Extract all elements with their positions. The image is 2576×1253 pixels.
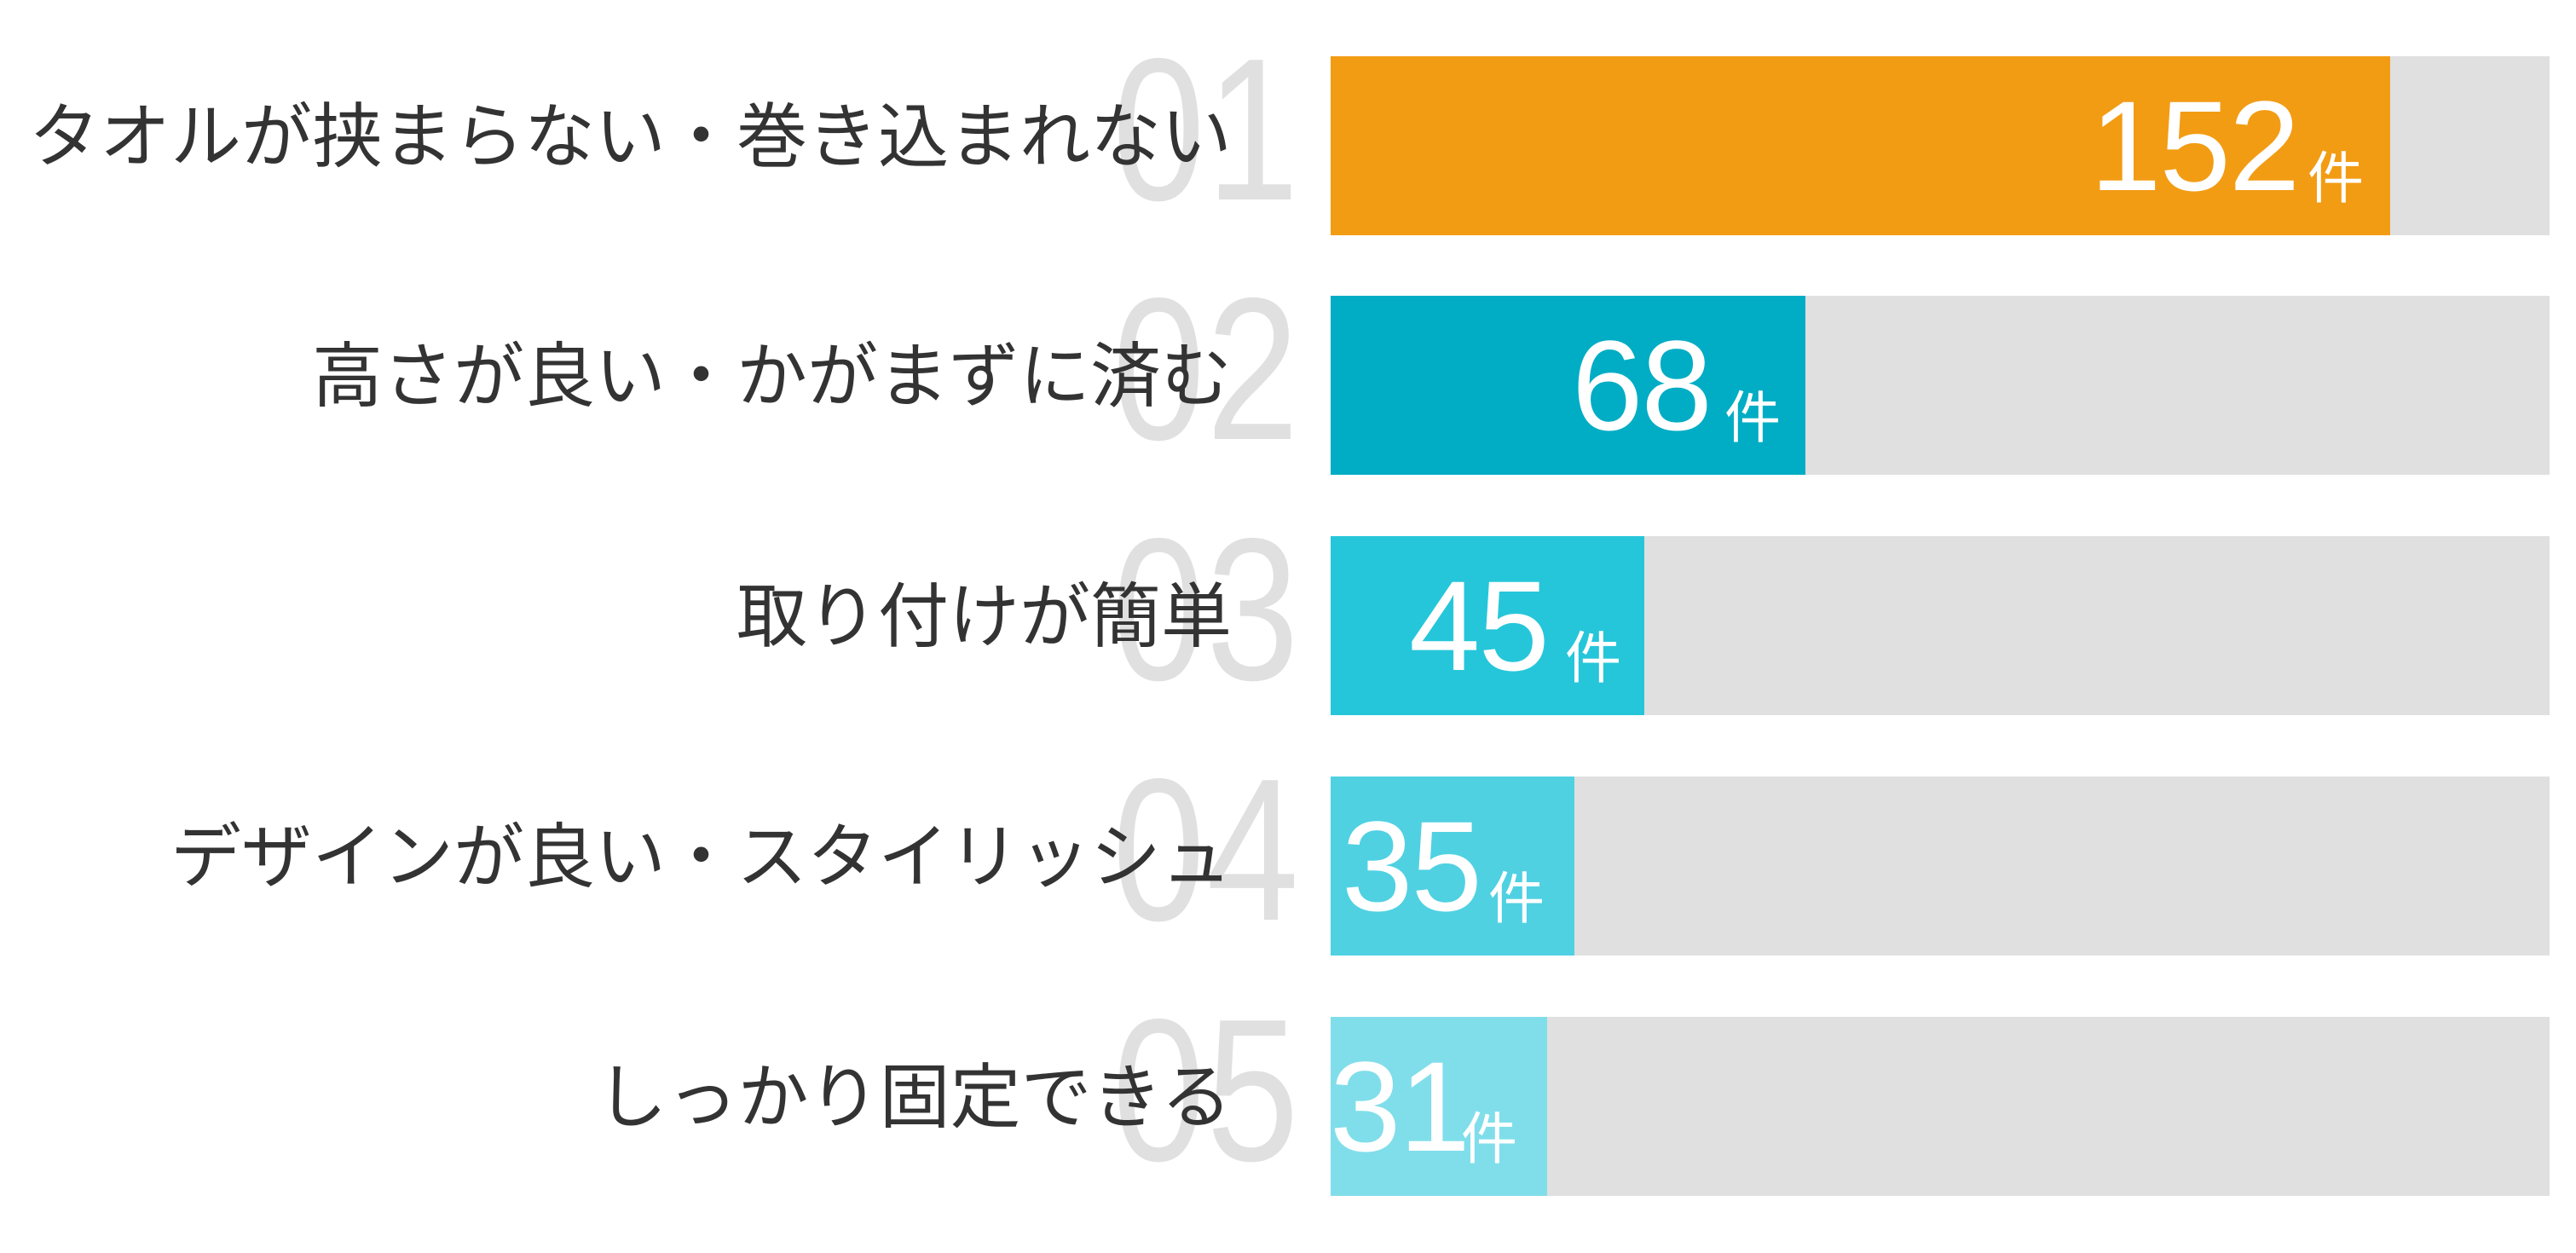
row 1 <box>29 17 2550 243</box>
rank number 01: 01 <box>1112 17 1300 243</box>
value 45件: 45 <box>1409 554 1548 697</box>
value 31件: 31 <box>1330 1035 1469 1178</box>
value 31件: 件 <box>1461 1107 1517 1170</box>
bar 2 <box>1331 296 2550 475</box>
rank number 05: 05 <box>1112 978 1300 1204</box>
value 68件: 68 <box>1572 314 1711 457</box>
value 35件: 件 <box>1488 867 1545 930</box>
bar 1 <box>1331 56 2550 235</box>
label 3: 取り付けが簡単 <box>736 577 1232 656</box>
value 152件: 152 <box>2090 74 2298 217</box>
value 35件 <box>1342 794 1545 938</box>
row 4 <box>170 737 2550 963</box>
bar 3 <box>1331 536 2550 715</box>
label 5: しっかり固定できる <box>597 1058 1232 1137</box>
value 152件: 件 <box>2307 147 2364 210</box>
row 5 <box>597 978 2550 1204</box>
value 45件 <box>1409 554 1621 697</box>
value 45件: 件 <box>1565 626 1621 690</box>
label 2: 高さが良い・かがまずに済む <box>312 337 1232 416</box>
bar 4 <box>1331 777 2550 956</box>
rank number 04: 04 <box>1112 737 1300 963</box>
value 35件: 35 <box>1342 794 1481 938</box>
row 3 <box>736 497 2550 723</box>
label 1: タオルが挟まらない・巻き込まれない <box>29 97 1232 176</box>
row 2 <box>312 257 2550 482</box>
bar 5 <box>1331 1017 2550 1196</box>
rank number 03: 03 <box>1112 497 1300 723</box>
label 4: デザインが良い・スタイリッシュ <box>170 817 1232 897</box>
value 68件: 件 <box>1724 386 1781 449</box>
rank number 02: 02 <box>1112 257 1300 482</box>
value 68件 <box>1572 314 1781 457</box>
